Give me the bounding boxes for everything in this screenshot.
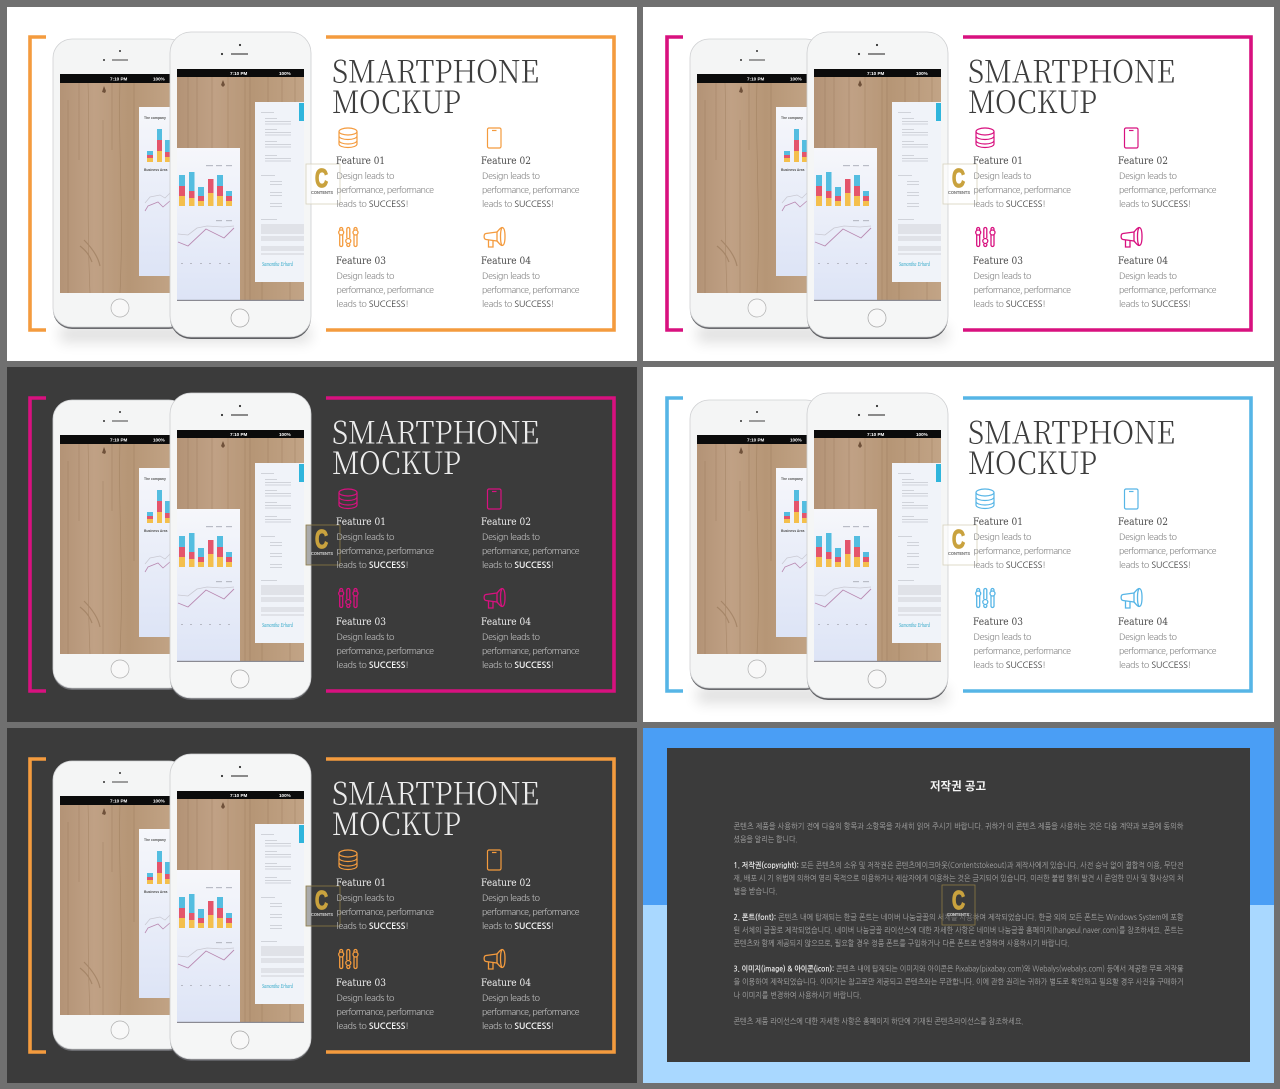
phone mockups: 7:10 PM — [230, 71, 248, 76]
notice heading: 저작권 공고 — [930, 779, 986, 793]
right frame — [963, 37, 1251, 330]
phone mockups: The company — [781, 477, 803, 481]
feature 03: leads to SUCCESS! — [974, 300, 1046, 309]
feature 04: performance, performance — [482, 647, 580, 656]
feature 02: Design leads to — [1119, 533, 1178, 542]
feature 04: performance, performance — [482, 286, 580, 295]
feature 02 — [481, 489, 580, 570]
feature 01 — [336, 850, 434, 931]
phone mockups: 100% — [279, 71, 291, 76]
phone mockups: 7:10 PM — [110, 438, 128, 442]
left bracket — [667, 398, 683, 691]
feature 03: leads to SUCCESS! — [974, 661, 1046, 670]
clause 3: image and icon: 나 이미지를 변경하여 사용하시기 바랍니다. — [734, 991, 862, 1000]
feature 01: performance, performance — [974, 547, 1071, 556]
feature 02 — [481, 128, 580, 209]
right frame — [326, 398, 614, 691]
feature 04: Feature 04 — [481, 617, 531, 628]
feature 02: Feature 02 — [1118, 517, 1168, 528]
feature 03: performance, performance — [974, 286, 1071, 295]
watermark: C — [315, 885, 328, 915]
clause 3: image and icon: 3. 이미지(image) & 아이콘(icon): 콘텐츠 내에 탑재되는 이미지와 아이콘은 Pixabay(pixabay.com)와 Webalys(webalys.com) 등에서 제공한 무료 저작물 — [734, 964, 1184, 974]
feature 01: performance, performance — [336, 186, 434, 195]
phone mockups: Business Area — [781, 529, 805, 533]
phone mockups: 100% — [790, 438, 802, 442]
feature 01: performance, performance — [974, 186, 1071, 195]
watermark: C — [952, 524, 965, 554]
feature 04: Feature 04 — [481, 978, 531, 989]
feature 04 — [481, 588, 580, 670]
phone shadow — [697, 687, 947, 703]
feature 01: leads to SUCCESS! — [336, 200, 409, 209]
phone mockups: 100% — [790, 76, 802, 82]
panel: blue on white — [643, 367, 1274, 722]
clause 2: font — [734, 912, 1184, 948]
feature 04: Feature 04 — [481, 256, 531, 267]
panel: orange on dark — [7, 728, 637, 1083]
feature 03: Design leads to — [336, 994, 395, 1003]
feature 03: Feature 03 — [336, 256, 386, 267]
feature 02: Feature 02 — [481, 517, 531, 528]
phone mockups — [53, 754, 311, 1061]
feature 03: leads to SUCCESS! — [336, 300, 409, 309]
left bracket — [667, 37, 683, 330]
title: MOCKUP — [332, 799, 461, 844]
title: MOCKUP — [968, 438, 1097, 483]
clause 3: image and icon: 을 이용하여 제작되었습니다. 이미지는 참고로만 제공되고 콘텐츠와는 무관합니다. 이에 관한 권리는 귀하가 별도로 확인하고 필요할 경우 사진을 구매하거 — [734, 978, 1184, 986]
feature 03: Feature 03 — [973, 256, 1023, 267]
feature 02: Design leads to — [482, 533, 541, 542]
phone mockups: Business Area — [144, 529, 168, 533]
phone mockups: 7:10 PM — [867, 432, 885, 437]
phone mockups: The company — [144, 116, 166, 120]
panel: copyright notice — [643, 728, 1274, 1083]
feature 03 — [973, 228, 1071, 309]
phone mockups: Business Area — [781, 168, 805, 172]
feature 01: Feature 01 — [336, 878, 386, 889]
clause 1: copyright: 벌을 받습니다. — [734, 887, 778, 896]
feature 01: Design leads to — [974, 172, 1032, 181]
feature 02: Feature 02 — [481, 156, 531, 167]
title: MOCKUP — [332, 77, 461, 122]
feature 04: Design leads to — [482, 633, 541, 642]
phone mockups: 100% — [153, 798, 165, 804]
feature 01: Design leads to — [974, 533, 1032, 542]
feature 02: performance, performance — [482, 186, 580, 195]
feature 03: Design leads to — [336, 633, 395, 642]
intro paragraph — [734, 822, 1184, 844]
feature 04: leads to SUCCESS! — [482, 661, 554, 670]
feature 04 — [1118, 588, 1217, 670]
title — [332, 768, 539, 844]
title — [968, 46, 1175, 122]
feature 02: leads to SUCCESS! — [482, 200, 554, 209]
feature 03: performance, performance — [336, 647, 434, 656]
intro paragraph: 콘텐츠 제품을 사용하기 전에 다음의 항목과 소항목을 자세히 읽어 주시기 바랍니다. 귀하가 이 콘텐츠 제품을 사용하는 것은 다음 계약과 보증에 동의하 — [734, 822, 1184, 831]
title: SMARTPHONE — [332, 46, 539, 92]
feature 02: Design leads to — [482, 894, 541, 903]
watermark — [306, 885, 340, 926]
clause 1: copyright: 1. 저작권(copyright): 모든 콘텐츠의 소유 및 저작권은 콘텐츠메이크아웃(Contentstokeout)과 제작사에게 있습니다. 사전 승낙 없이 결합적 이용, 무단전 — [734, 860, 1184, 870]
feature 04: Design leads to — [482, 272, 541, 281]
feature 03: leads to SUCCESS! — [336, 661, 409, 670]
phone mockups: 100% — [279, 432, 291, 437]
watermark: C — [315, 163, 328, 193]
left bracket — [30, 37, 46, 330]
feature 04: Design leads to — [482, 994, 541, 1003]
title: SMARTPHONE — [332, 768, 539, 814]
phone mockups: Samantha Erhard — [899, 262, 931, 268]
feature 01: leads to SUCCESS! — [336, 922, 409, 931]
phone mockups: Samantha Erhard — [262, 262, 294, 268]
title — [332, 46, 539, 122]
feature 02: leads to SUCCESS! — [482, 561, 554, 570]
feature 01: leads to SUCCESS! — [974, 200, 1046, 209]
phone mockups: Samantha Erhard — [262, 623, 294, 629]
title: MOCKUP — [332, 438, 461, 483]
watermark — [943, 524, 977, 565]
feature 01: Design leads to — [336, 172, 395, 181]
phone mockups: The company — [781, 116, 803, 120]
phone mockups: 7:10 PM — [110, 798, 128, 804]
feature 03 — [973, 588, 1071, 670]
left bracket — [30, 398, 46, 691]
watermark — [943, 163, 977, 204]
title: SMARTPHONE — [968, 408, 1175, 452]
feature 02: leads to SUCCESS! — [482, 922, 554, 931]
feature 03: performance, performance — [974, 647, 1071, 656]
feature 03 — [336, 950, 434, 1031]
watermark — [306, 524, 340, 565]
phone mockups: Business Area — [144, 890, 168, 894]
watermark: C — [952, 163, 965, 193]
feature 04: leads to SUCCESS! — [482, 300, 554, 309]
phone mockups: 100% — [279, 793, 291, 798]
title: MOCKUP — [968, 77, 1097, 122]
phone mockups: 7:10 PM — [230, 793, 248, 798]
feature 01: Feature 01 — [973, 156, 1023, 167]
watermark — [942, 885, 975, 925]
phone mockups: Samantha Erhard — [899, 623, 931, 629]
watermark: CONTENTS — [311, 190, 333, 195]
watermark — [306, 163, 340, 204]
feature 02: leads to SUCCESS! — [1119, 561, 1192, 570]
feature 01: Design leads to — [336, 894, 395, 903]
feature 01 — [973, 489, 1071, 570]
feature 04 — [481, 950, 580, 1031]
feature 01: performance, performance — [336, 547, 434, 556]
feature 02: performance, performance — [1119, 186, 1217, 195]
feature 01 — [336, 128, 434, 209]
feature 03: leads to SUCCESS! — [336, 1022, 409, 1031]
feature 04: leads to SUCCESS! — [482, 1022, 554, 1031]
feature 03 — [336, 588, 434, 670]
feature 02 — [1118, 128, 1217, 209]
watermark: CONTENTS — [948, 551, 970, 556]
feature 02: performance, performance — [482, 908, 580, 917]
clause 2: font: 2. 폰트(font): 콘텐츠 내에 탑재되는 한글 폰트는 네이버 나눔글꼴의 서체를 사용하여 제작되었습니다. 한글 외의 모든 폰트는 Windows System에 포함 — [734, 912, 1184, 922]
clause 3: image and icon — [734, 964, 1184, 1000]
feature 03: Feature 03 — [973, 617, 1023, 628]
phone mockups — [690, 393, 948, 700]
phone mockups: The company — [144, 838, 166, 842]
title: SMARTPHONE — [968, 46, 1175, 92]
feature 04: leads to SUCCESS! — [1119, 300, 1192, 309]
feature 02 — [1118, 489, 1217, 570]
watermark: CONTENTS — [948, 190, 970, 195]
feature 03: performance, performance — [336, 1008, 434, 1017]
clause 1: copyright — [734, 860, 1184, 896]
feature 02: Feature 02 — [481, 878, 531, 889]
feature 02 — [481, 850, 580, 931]
feature 04: leads to SUCCESS! — [1119, 661, 1192, 670]
phone shadow — [60, 326, 310, 342]
phone mockups: 7:10 PM — [230, 432, 248, 437]
title: SMARTPHONE — [332, 408, 539, 452]
watermark: CONTENTS — [947, 912, 969, 917]
feature 03: Feature 03 — [336, 978, 386, 989]
watermark: C — [952, 885, 965, 915]
feature 03: Design leads to — [974, 272, 1032, 281]
watermark: CONTENTS — [311, 551, 333, 556]
phone mockups — [53, 393, 311, 700]
phone mockups: 100% — [153, 438, 165, 442]
clause 2: font: 된 서체의 글꼴로 제작되었습니다. 네이버 나눔글꼴 라이선스에 대한 자세한 사항은 네이버 나눔글꼴 홈페이지(hangeul.naver.com)를 참조하세요. 폰트는 — [734, 925, 1184, 935]
feature 03 — [336, 228, 434, 309]
phone mockups — [53, 32, 311, 339]
feature 03: Feature 03 — [336, 617, 386, 628]
feature 01 — [336, 489, 434, 570]
panel: orange on white — [7, 7, 637, 361]
watermark: CONTENTS — [311, 912, 333, 917]
phone mockups: 100% — [916, 71, 928, 76]
phone mockups: 7:10 PM — [747, 438, 765, 442]
phone shadow — [697, 326, 947, 342]
phone mockups: 7:10 PM — [110, 76, 128, 82]
phone mockups: 100% — [916, 432, 928, 437]
right frame — [326, 37, 614, 330]
feature 01: leads to SUCCESS! — [336, 561, 409, 570]
license note: 콘텐츠 제품 라이선스에 대한 자세한 사항은 홈페이지 하단에 기재된 콘텐츠라이선스를 참조하세요. — [734, 1017, 1024, 1026]
panel: magenta on dark — [7, 367, 637, 722]
feature 02: Feature 02 — [1118, 156, 1168, 167]
panel: magenta on white — [643, 7, 1274, 361]
feature 01: Feature 01 — [336, 517, 386, 528]
title — [332, 408, 539, 483]
title — [968, 408, 1175, 483]
feature 01: leads to SUCCESS! — [974, 561, 1046, 570]
feature 04: performance, performance — [1119, 647, 1217, 656]
phone mockups: 100% — [153, 76, 165, 82]
clause 2: font: 콘텐츠와 함께 제공되지 않으므로, 필요할 경우 정품 폰트를 구입하거나 다른 폰트로 변경하여 사용하시기 바랍니다. — [734, 939, 1070, 948]
feature 03: Design leads to — [336, 272, 395, 281]
feature 01: Design leads to — [336, 533, 395, 542]
intro paragraph: 셨음을 알리는 합니다. — [734, 835, 798, 844]
feature 02: Design leads to — [482, 172, 541, 181]
right frame — [326, 759, 614, 1052]
phone mockups: Samantha Erhard — [262, 984, 294, 990]
feature 02: performance, performance — [1119, 547, 1217, 556]
right frame — [963, 398, 1251, 691]
phone mockups: Business Area — [144, 168, 168, 172]
feature 01: performance, performance — [336, 908, 434, 917]
feature 01: Feature 01 — [973, 517, 1023, 528]
phone mockups — [690, 32, 948, 339]
left bracket — [30, 759, 46, 1052]
feature 02: performance, performance — [482, 547, 580, 556]
phone mockups: 7:10 PM — [747, 76, 765, 82]
feature 04: Design leads to — [1119, 272, 1178, 281]
feature 04: Feature 04 — [1118, 617, 1168, 628]
feature 04 — [1118, 228, 1217, 309]
feature 01: Feature 01 — [336, 156, 385, 167]
feature 04 — [481, 228, 580, 309]
feature 01 — [973, 128, 1071, 209]
phone mockups: The company — [144, 477, 166, 481]
feature 02: leads to SUCCESS! — [1119, 200, 1192, 209]
feature 04: performance, performance — [1119, 286, 1217, 295]
feature 04: Feature 04 — [1118, 256, 1168, 267]
feature 03: performance, performance — [336, 286, 434, 295]
feature 04: performance, performance — [482, 1008, 580, 1017]
watermark: C — [315, 524, 328, 554]
phone mockups: 7:10 PM — [867, 71, 885, 76]
feature 04: Design leads to — [1119, 633, 1178, 642]
feature 02: Design leads to — [1119, 172, 1178, 181]
clause 1: copyright: 재, 배포 시 기 위법에 의하여 영리 목적으로 이용하거나 제삼자에게 이용하는 것은 금지되어 있습니다. 이러한 불법 행위 발견 시 준엄한 민사 및 형사상의 처 — [734, 874, 1184, 883]
feature 03: Design leads to — [974, 633, 1032, 642]
